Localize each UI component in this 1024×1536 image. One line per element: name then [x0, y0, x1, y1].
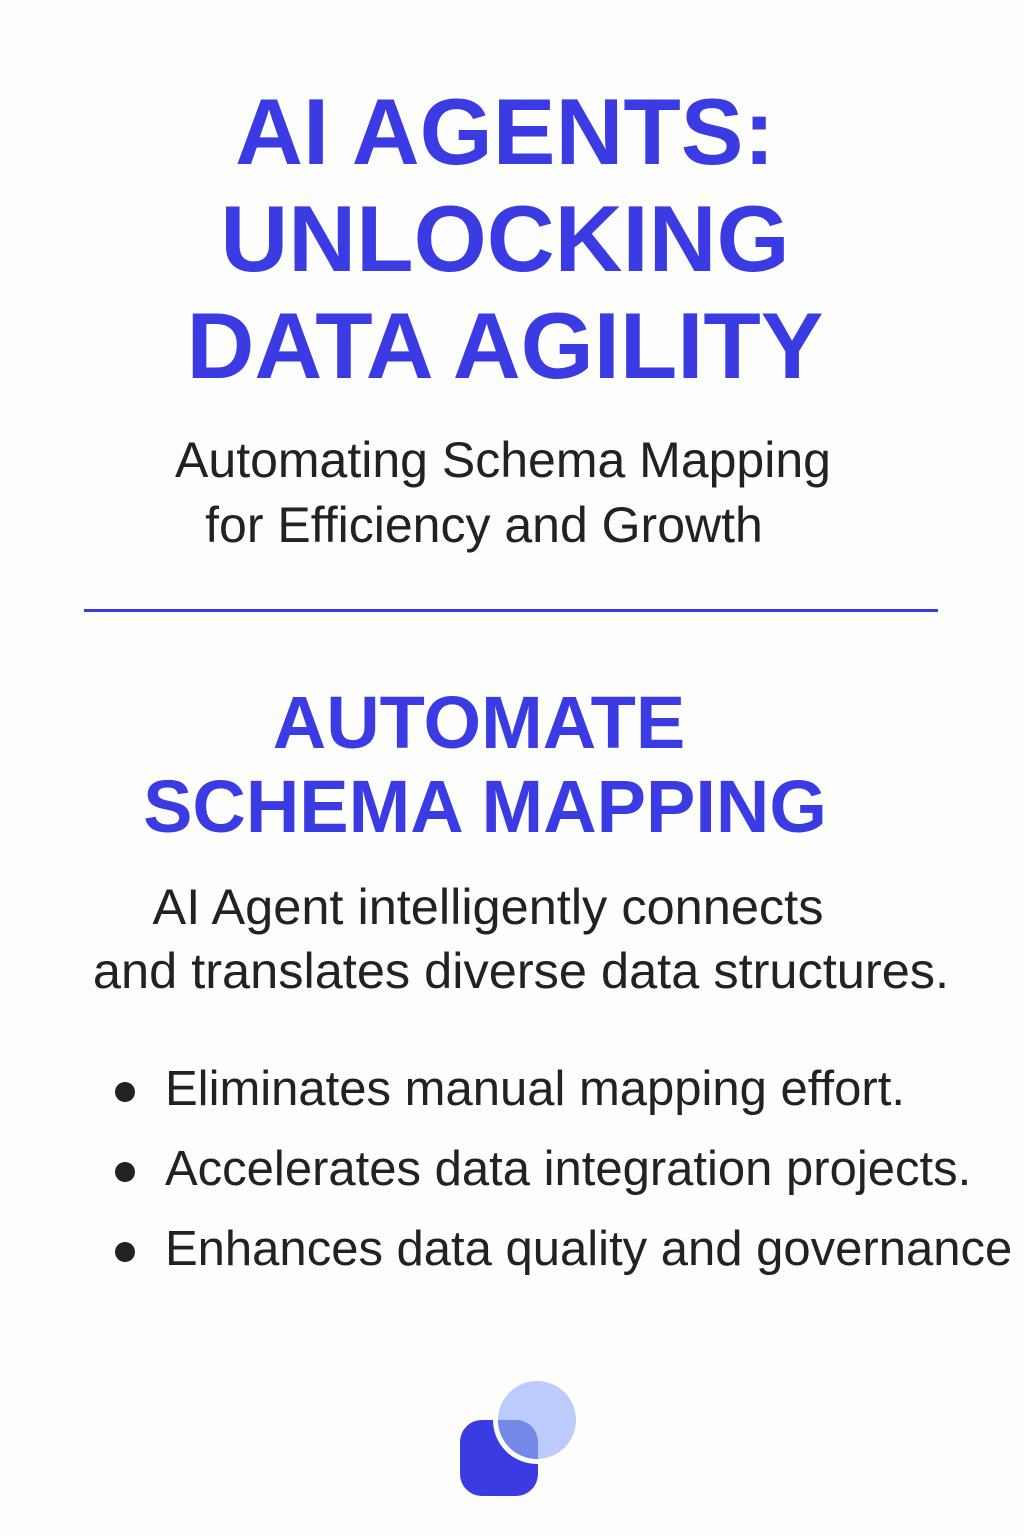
subtitle	[175, 432, 831, 553]
bullet list	[115, 1062, 1012, 1276]
section heading: SCHEMA MAPPING	[143, 765, 827, 848]
description	[93, 878, 949, 999]
title: UNLOCKING	[220, 186, 790, 291]
bullet 2: Accelerates data integration projects.	[165, 1142, 971, 1196]
title: DATA AGILITY	[186, 293, 824, 398]
section heading: AUTOMATE	[273, 681, 685, 764]
section heading	[143, 681, 827, 848]
title: AI AGENTS:	[235, 79, 775, 184]
icon: logo	[460, 1381, 576, 1496]
subtitle: for Efficiency and Growth	[205, 497, 763, 553]
subtitle: Automating Schema Mapping	[175, 432, 831, 488]
description: AI Agent intelligently connects	[153, 878, 823, 935]
bullet 3: Enhances data quality and governance	[165, 1222, 1012, 1276]
bullet 1: Eliminates manual mapping effort.	[165, 1062, 905, 1116]
title	[186, 79, 824, 398]
description: and translates diverse data structures.	[93, 942, 949, 999]
